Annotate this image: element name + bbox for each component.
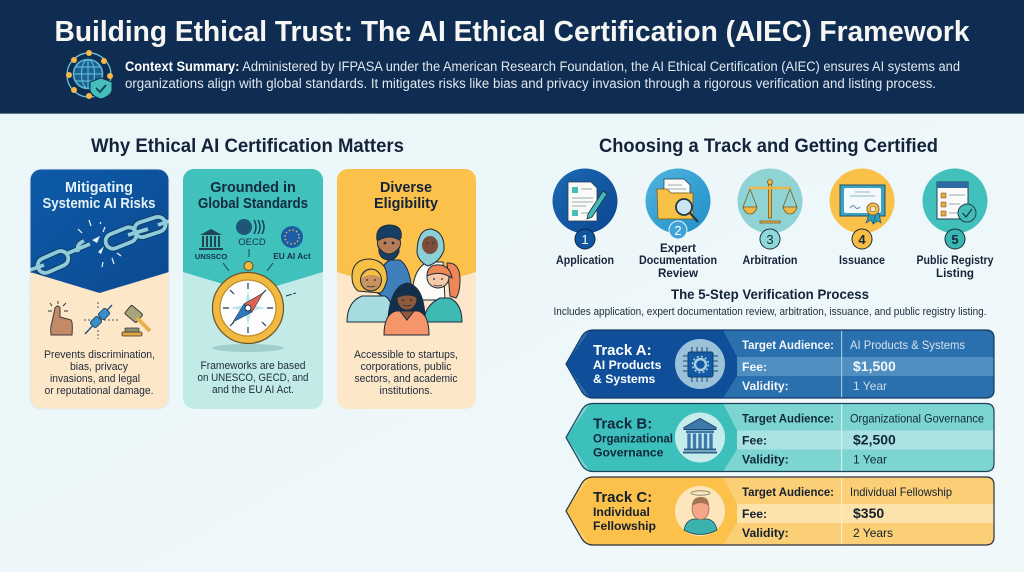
track name	[593, 489, 656, 533]
verification process heading: The 5-Step Verification Process	[671, 287, 869, 302]
card text: bias, privacy	[70, 361, 128, 373]
icon: broken link	[84, 302, 118, 339]
step 2: expert documentation review: Documentation	[639, 254, 717, 267]
card title: Eligibility	[374, 196, 438, 212]
track details: $350	[853, 505, 884, 521]
track A row	[565, 329, 995, 399]
track name	[593, 342, 662, 386]
card text: institutions.	[380, 385, 432, 397]
step 2: expert documentation review	[639, 168, 717, 280]
track details: $1,500	[853, 358, 896, 374]
step 2: expert documentation review: Expert	[660, 242, 696, 255]
track C row	[565, 476, 995, 546]
track name: Organizational	[593, 432, 673, 446]
track name: Track B:	[593, 416, 652, 432]
title: Building Ethical Trust: The AI Ethical Certification (AIEC) Framework	[54, 16, 970, 48]
track details: 1 Year	[853, 379, 887, 393]
card text: corporations, public	[360, 361, 452, 373]
icon: EU flag: EU AI Act	[273, 251, 311, 261]
step 4: issuance	[830, 168, 894, 267]
track name: Fellowship	[593, 519, 656, 533]
step 3: arbitration: Arbitration	[742, 254, 798, 267]
card title: Grounded in	[210, 180, 296, 196]
card title	[42, 180, 156, 212]
icon: EU flag	[267, 226, 311, 271]
card title: Systemic AI Risks	[42, 196, 156, 212]
icon: OECD logo: OECD	[238, 237, 266, 248]
step 4: issuance: 4	[858, 232, 866, 247]
track name: Track C:	[593, 489, 652, 506]
card title	[374, 180, 438, 212]
step 5: public registry listing: 5	[951, 232, 959, 247]
track B row	[565, 402, 995, 472]
card text: Accessible to startups,	[354, 349, 458, 361]
track details: Target Audience:	[742, 485, 834, 499]
step 5: public registry listing: Listing	[936, 267, 974, 280]
icon: institution	[675, 412, 725, 462]
icon: hand	[48, 301, 72, 335]
track details: Fee:	[742, 507, 767, 521]
step 2: expert documentation review: 2	[674, 223, 682, 238]
track name: AI Products	[593, 358, 662, 372]
step 2: expert documentation review: Review	[658, 267, 699, 280]
icon: UNESCO temple	[195, 229, 229, 271]
icon: chip	[675, 339, 725, 389]
card text: and the EU AI Act.	[212, 384, 294, 396]
track details: Individual Fellowship	[850, 485, 952, 499]
step 1: application	[552, 168, 618, 267]
step 4: issuance: Issuance	[839, 254, 886, 267]
track details	[742, 485, 952, 540]
track details: AI Products & Systems	[850, 338, 965, 352]
track details: Validity:	[742, 379, 789, 393]
panel: diverse eligibility	[337, 169, 476, 409]
card text	[198, 360, 308, 396]
track details: Target Audience:	[742, 412, 834, 426]
icon: UNESCO temple: UNSSCO	[195, 252, 227, 261]
icon: OECD logo	[236, 219, 266, 257]
card text: invasions, and legal	[50, 373, 140, 385]
card title: Mitigating	[65, 180, 133, 196]
illustration: group of people	[347, 225, 462, 335]
step 5: public registry listing	[916, 168, 994, 280]
track details: Organizational Governance	[850, 412, 984, 426]
track details: Validity:	[742, 526, 789, 540]
heading: why it matters: Why Ethical AI Certification Matters	[91, 135, 404, 157]
track details	[742, 338, 965, 393]
icon: person with halo	[675, 486, 725, 536]
panel: grounded in global standards	[183, 169, 323, 409]
track name: Governance	[593, 446, 664, 460]
track name	[593, 416, 673, 460]
context summary: organizations align with global standards. It mitigates risks like bias and privacy invasion through a rigorous verification and listing process.	[125, 76, 936, 91]
track details: 2 Years	[853, 526, 893, 540]
track name: Track A:	[593, 342, 652, 359]
card text: on UNESCO, GECD, and	[198, 372, 308, 384]
track details: Fee:	[742, 360, 767, 374]
icon: broken chain	[30, 215, 172, 275]
step 3: arbitration	[738, 168, 802, 267]
heading: choosing a track: Choosing a Track and Getting Certified	[599, 135, 938, 157]
icon: compass	[212, 262, 296, 352]
track name: & Systems	[593, 372, 656, 386]
track details: Fee:	[742, 434, 767, 448]
icon: gavel	[122, 305, 150, 336]
step 1: application: Application	[556, 254, 614, 267]
card text	[354, 349, 458, 397]
step 3: arbitration: 3	[766, 232, 774, 247]
card text: Frameworks are based	[200, 360, 306, 372]
track details: Validity:	[742, 452, 789, 466]
step 5: public registry listing: Public Registry	[916, 254, 994, 267]
step 1: application: 1	[581, 232, 589, 247]
panel: mitigating systemic AI risks	[30, 169, 172, 409]
track details	[742, 412, 984, 466]
card text	[44, 349, 155, 397]
card text: Prevents discrimination,	[44, 349, 155, 361]
card text: sectors, and academic	[354, 373, 458, 385]
track details: $2,500	[853, 432, 896, 448]
verification process description: Includes application, expert documentation review, arbitration, issuance, and public registry listing.	[554, 306, 986, 318]
context summary: Context Summary: Administered by IFPASA under the American Research Foundation, the AI Ethical Certification (AIEC) ensures AI systems and	[125, 59, 960, 74]
icon: globe with shield	[66, 50, 113, 99]
card title: Global Standards	[198, 196, 308, 212]
card text: or reputational damage.	[44, 385, 154, 397]
track details: 1 Year	[853, 452, 887, 466]
context summary	[125, 59, 960, 91]
track details: Target Audience:	[742, 338, 834, 352]
header band	[0, 0, 1024, 114]
card title	[198, 180, 308, 212]
track name: Individual	[593, 505, 650, 519]
card title: Diverse	[380, 180, 432, 196]
